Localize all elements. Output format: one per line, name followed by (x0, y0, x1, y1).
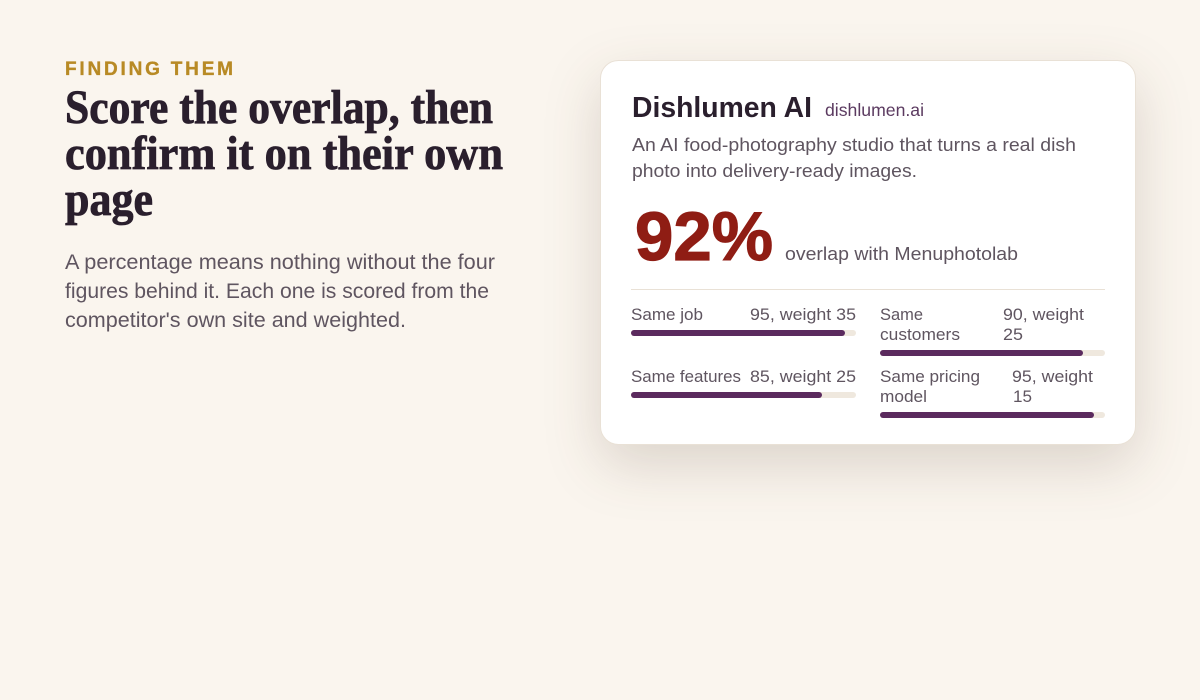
competitor description (632, 134, 1076, 181)
panel: competitor card (600, 60, 1136, 444)
competitor description: An AI food-photography studio that turns a real dish (632, 134, 1076, 155)
title: Score the overlap, then (65, 82, 493, 134)
title: page (65, 174, 153, 226)
metric: same pricing model: model (880, 388, 927, 406)
metric: same pricing model (880, 368, 1105, 418)
eyebrow: finding them: FINDING THEM (65, 59, 233, 80)
metric: same pricing model: 95, weight (1012, 368, 1093, 386)
lead paragraph: A percentage means nothing without the four (65, 251, 495, 274)
metric: same job: Same job (631, 306, 703, 324)
metric: same customers: 25 (1003, 326, 1023, 344)
overlap caption: overlap with Menuphotolab (785, 243, 1018, 264)
metric: same pricing model: Same pricing (880, 368, 980, 386)
competitor domain: dishlumen.ai (825, 100, 924, 120)
metric: same job: 95, weight 35 (750, 306, 856, 324)
metric: same customers: 90, weight (1003, 306, 1084, 324)
metric: same features (631, 368, 856, 398)
lead paragraph (65, 251, 495, 332)
overlap score: 92% (635, 198, 773, 275)
metric: same job (631, 306, 856, 336)
metric: same customers: customers (880, 326, 960, 344)
metric: same customers (880, 306, 1105, 356)
metric: same customers: Same (880, 306, 923, 324)
competitor name: Dishlumen AI (632, 92, 812, 124)
card background (600, 60, 1136, 444)
title: confirm it on their own (65, 128, 503, 180)
metric: same features: Same features (631, 368, 741, 386)
metric: same features: 85, weight 25 (750, 368, 856, 386)
lead paragraph: figures behind it. Each one is scored from the (65, 280, 489, 303)
metric: same pricing model: 15 (1013, 388, 1032, 406)
lead paragraph: competitor's own site and weighted. (65, 309, 406, 332)
title (65, 82, 503, 226)
competitor description: photo into delivery-ready images. (632, 160, 917, 181)
